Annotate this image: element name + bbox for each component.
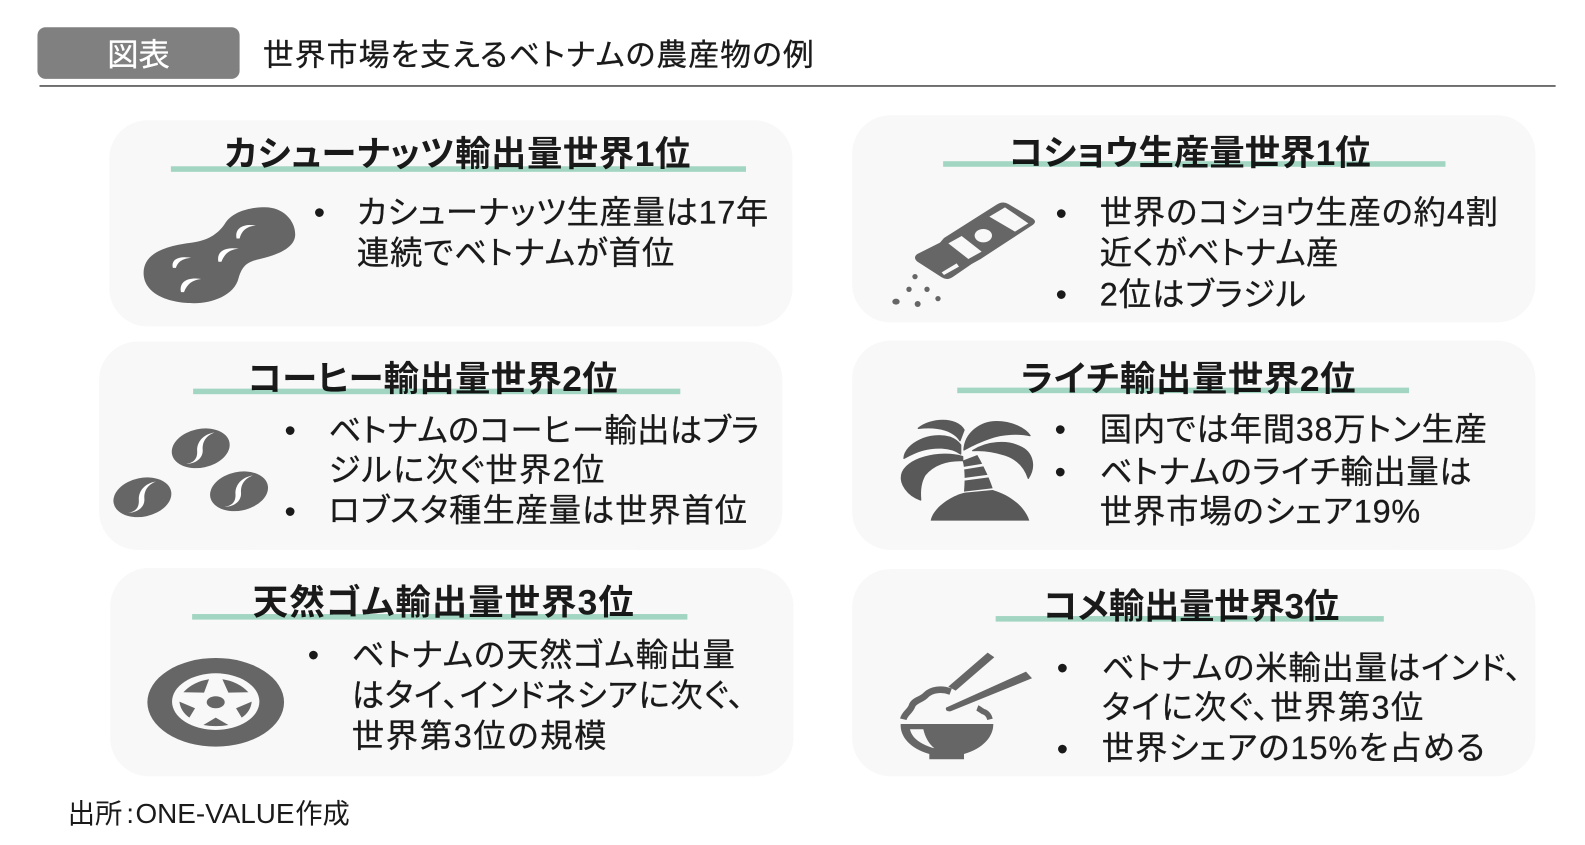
text block: pepper: • <box>1056 195 1067 231</box>
title label: 図表 <box>37 27 240 79</box>
icon: cashew <box>144 207 295 303</box>
panel: natural rubber <box>110 568 794 776</box>
text block: rice: ベトナムの米輸出量はインド、 <box>1102 650 1521 686</box>
icon: pepper shaker <box>892 202 1035 307</box>
source note: 作成 <box>295 798 350 829</box>
text block: rice <box>1057 650 1521 767</box>
text block: lychee: 世界市場のシェア19% <box>1100 494 1420 530</box>
text block: cashew nuts: カシューナッツ生産量は17年 <box>357 194 768 230</box>
text block: rice: 世界シェアの15%を占める <box>1102 730 1485 766</box>
heading: cashew nuts: カシューナッツ輸出量世界1位 <box>224 135 690 174</box>
panel: lychee <box>852 341 1535 550</box>
panel: rice <box>852 569 1535 776</box>
icon: palm tree <box>901 420 1032 521</box>
text block: rice: タイに次ぐ、世界第3位 <box>1102 690 1423 726</box>
heading: coffee: コーヒー輸出量世界2位 <box>248 360 618 399</box>
text block: coffee: ジルに次ぐ世界2位 <box>329 452 604 488</box>
text block: lychee <box>1055 412 1487 530</box>
panel: pepper <box>852 115 1535 322</box>
heading: lychee: ライチ輸出量世界2位 <box>1021 360 1355 399</box>
heading: pepper: コショウ生産量世界1位 <box>1009 134 1371 173</box>
panel: coffee <box>99 342 782 550</box>
text block: pepper: 世界のコショウ生産の約4割 <box>1100 194 1498 230</box>
source note: : <box>126 798 134 829</box>
text block: natural rubber <box>308 637 744 754</box>
text block: cashew nuts: 連続でベトナムが首位 <box>357 235 674 271</box>
icon: rice bowl <box>901 653 1032 759</box>
text block: natural rubber: ベトナムの天然ゴム輸出量 <box>352 637 735 673</box>
text block: lychee: • <box>1055 412 1066 448</box>
title label: 図表: 図表 <box>107 38 170 73</box>
text block: coffee: • <box>284 494 296 530</box>
text block: natural rubber: はタイ、インドネシアに次ぐ、 <box>352 678 744 714</box>
panel: cashew nuts <box>109 120 793 326</box>
text block: coffee: ベトナムのコーヒー輸出はブラ <box>329 413 759 449</box>
text block: pepper: 近くがベトナム産 <box>1100 235 1338 271</box>
text block: pepper <box>1056 194 1498 312</box>
icon: coffee beans <box>110 423 272 522</box>
source note: ONE-VALUE <box>136 798 295 829</box>
icon: tire <box>147 658 284 747</box>
text block: lychee: ベトナムのライチ輸出量は <box>1100 454 1472 490</box>
title: 世界市場を支えるベトナムの農産物の例 <box>263 38 814 73</box>
text block: pepper: • <box>1056 276 1067 312</box>
text block: cashew nuts: • <box>314 194 325 230</box>
source note: 出所 <box>68 798 122 829</box>
heading: natural rubber: 天然ゴム輸出量世界3位 <box>253 583 634 623</box>
text block: lychee: 国内では年間38万トン生産 <box>1100 412 1487 448</box>
text block: natural rubber: 世界第3位の規模 <box>352 718 607 754</box>
text block: natural rubber: • <box>308 637 319 673</box>
heading: rice: コメ輸出量世界3位 <box>1043 588 1339 627</box>
text block: coffee: • <box>284 413 296 449</box>
text block: pepper: 2位はブラジル <box>1100 276 1306 312</box>
text block: coffee: ロブスタ種生産量は世界首位 <box>329 493 747 529</box>
text block: lychee: • <box>1055 454 1066 490</box>
text block: rice: • <box>1057 650 1068 686</box>
text block: rice: • <box>1057 731 1068 767</box>
text block: cashew nuts <box>314 194 768 271</box>
text block: coffee <box>284 413 759 530</box>
